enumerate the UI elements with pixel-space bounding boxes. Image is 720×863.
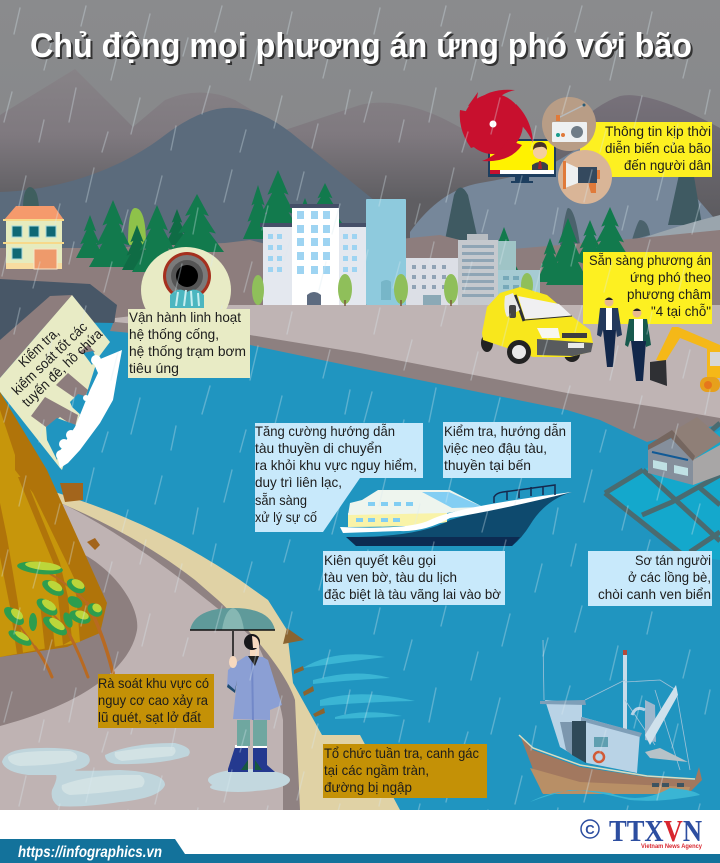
- callout: patrol: đường bị ngập: [324, 779, 412, 795]
- callout: drainage: hệ thống trạm bơm: [129, 343, 246, 359]
- agency logo TTXVN: TTXVN: [609, 813, 702, 848]
- fish cage grid: [605, 423, 720, 560]
- dam wall: [0, 295, 110, 470]
- callout: patrol: [323, 744, 487, 798]
- land: bottom-left road and sand embankment: [0, 480, 400, 810]
- background: brown ground: [0, 230, 720, 340]
- callout: guide vessels: Tăng cường hướng dẫn: [255, 423, 395, 439]
- spillway white water: [56, 350, 122, 468]
- background: stormy sky: [0, 0, 720, 340]
- small house: [3, 206, 64, 269]
- yellow callout: information: đến người dân: [624, 157, 711, 173]
- bent trees: [1, 560, 113, 677]
- typhoon symbol: [460, 90, 533, 161]
- callout: flash flood review: nguy cơ cao xảy ra: [98, 692, 208, 708]
- callout: anchoring: Kiểm tra, hướng dẫn: [444, 423, 566, 439]
- callout: dam check: kiểm soát tốt các: [8, 319, 90, 398]
- callout: evacuate cages: ở các lồng bè,: [628, 569, 711, 585]
- callout: drainage: Vận hành linh hoạt: [129, 309, 241, 325]
- callout: guide vessels: tàu thuyền di chuyển: [255, 440, 382, 456]
- yellow callout: four on the spot: phương châm: [627, 286, 711, 302]
- callout: patrol: tại các ngầm tràn,: [324, 762, 429, 778]
- callout: anchoring: thuyền tại bến: [444, 457, 531, 473]
- megaphone icon: [558, 150, 612, 204]
- callout: guide vessels: duy trì liên lạc,: [255, 474, 342, 490]
- callout: drainage: [128, 309, 250, 378]
- callout: evacuate cages: [588, 551, 712, 606]
- yacht: [340, 485, 572, 546]
- yellow callout: information: [580, 122, 712, 177]
- callout: anchoring: việc neo đậu tàu,: [444, 440, 547, 456]
- city buildings: [252, 199, 540, 306]
- callout: guide vessels: xử lý sự cố: [255, 509, 317, 525]
- footer url: https://infographics.vn: [18, 844, 162, 861]
- television news icon: [488, 139, 556, 183]
- callout: flash flood review: lũ quét, sạt lở đất: [98, 709, 201, 725]
- waves near embankment: [303, 654, 415, 719]
- copyright mark: C: [585, 822, 595, 837]
- pipe drain icon: [141, 247, 231, 333]
- callout: guide vessels: ra khỏi khu vực nguy hiểm,: [255, 457, 417, 473]
- callout: drainage: tiêu úng: [129, 360, 179, 376]
- dark hill behind dam: [0, 279, 117, 345]
- callout: call ships ashore: [323, 551, 505, 605]
- background: mountains: [0, 69, 720, 290]
- person with umbrella: [190, 608, 282, 772]
- callout: flash flood review: Rà soát khu vực có: [98, 675, 209, 691]
- yellow callout: information: Thông tin kịp thời: [605, 123, 711, 139]
- landslide hillside: [0, 392, 137, 726]
- callout: dam check: tuyến đê, hồ chứa: [18, 325, 105, 410]
- callout: call ships ashore: đặc biệt là tàu vãng lai vào bờ: [324, 586, 501, 602]
- fishing boat: [519, 640, 702, 802]
- callout: evacuate cages: Sơ tán người: [635, 552, 711, 568]
- coastal road: [110, 305, 720, 442]
- pine trees: [76, 170, 630, 285]
- callout: guide vessels: sẵn sàng: [255, 492, 307, 508]
- radio icon: [542, 97, 596, 151]
- callout: patrol: Tổ chức tuần tra, canh gác: [324, 745, 479, 761]
- yellow van: [481, 287, 593, 364]
- callout: guide vessels: [255, 423, 423, 532]
- people standing: [597, 298, 651, 381]
- yellow callout: four on the spot: "4 tại chỗ": [651, 303, 711, 319]
- callout: anchoring: [443, 422, 571, 478]
- raft house: [648, 417, 720, 485]
- sea: [0, 320, 720, 810]
- title: Chủ động mọi phương án ứng phó với bão: [30, 27, 692, 65]
- excavator: [650, 327, 720, 392]
- callout: call ships ashore: Kiên quyết kêu gọi: [324, 552, 436, 568]
- callout: call ships ashore: tàu ven bờ, tàu du lịch: [324, 569, 457, 585]
- footer band: [0, 810, 720, 863]
- callout: evacuate cages: chòi canh ven biển: [598, 586, 711, 602]
- callout: dam check: Kiểm tra,: [15, 324, 62, 370]
- callout: drainage: hệ thống cống,: [129, 326, 219, 342]
- copyright mark: [581, 820, 599, 838]
- yellow callout: four on the spot: [583, 252, 712, 324]
- callout: flash flood review: [98, 674, 214, 728]
- puddles: [2, 743, 290, 806]
- yellow callout: four on the spot: Sẵn sàng phương án: [589, 252, 711, 268]
- callout: dam check: [0, 303, 105, 410]
- yellow callout: information: diễn biến của bão: [605, 140, 711, 156]
- agency logo TTXVN: Vietnam News Agency: [641, 843, 702, 850]
- yellow callout: four on the spot: ứng phó theo: [630, 269, 711, 285]
